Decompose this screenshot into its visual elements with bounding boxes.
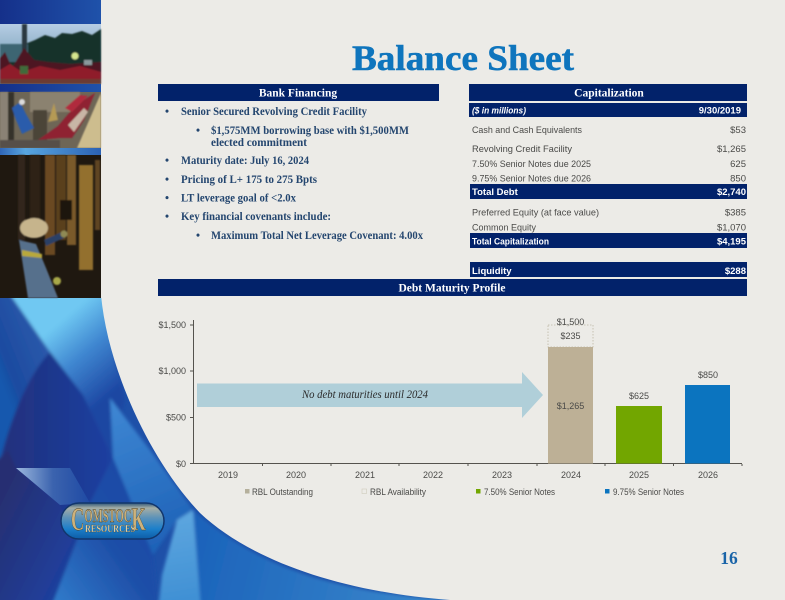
bullet list: bank terms: Maximum Total Net Leverage Covenant: 4.00x <box>211 230 423 242</box>
row: 7.50% notes: 625 <box>730 159 746 170</box>
bar chart: debt maturity <box>158 317 742 497</box>
legend <box>245 487 684 497</box>
x axis labels <box>218 470 718 480</box>
table header: 9/30/2019 <box>699 106 741 116</box>
legend: RBL Availability <box>370 487 426 497</box>
bullet list: bank terms: • <box>165 192 169 204</box>
row: 7.50% notes <box>472 159 746 170</box>
bar: 2024 RBL availability: $1,500 <box>557 317 584 327</box>
logo: Comstock Resources: OMSTOC <box>84 506 131 527</box>
bar: 2024 RBL availability <box>548 317 593 347</box>
bullet list: bank terms: • <box>165 155 169 167</box>
heading: debt maturity profile <box>158 279 747 296</box>
title: Balance Sheet <box>352 38 574 78</box>
heading: capitalization <box>469 84 747 101</box>
bullet list: bank terms: • <box>196 125 200 137</box>
arrow: no debt maturities until 2024 <box>197 372 543 418</box>
heading: debt maturity profile: Debt Maturity Profile <box>398 282 506 294</box>
y axis labels: $500 <box>166 412 186 422</box>
heading: capitalization: Capitalization <box>574 88 644 100</box>
panel: capitalization <box>469 84 747 277</box>
y axis labels: $1,500 <box>158 320 186 330</box>
bullet list: bank terms: • <box>196 230 200 242</box>
row: total capitalization: $4,195 <box>717 236 747 248</box>
row: cash <box>472 125 746 136</box>
logo: Comstock Resources: K <box>131 500 146 537</box>
row: total debt <box>470 184 747 199</box>
row: 9.75% notes <box>472 174 746 184</box>
row: total capitalization <box>470 233 747 248</box>
row: 9.75% notes: 9.75% Senior Notes due 2026 <box>472 174 591 184</box>
photo strip <box>0 0 101 298</box>
page number: 16 <box>720 548 738 568</box>
photo: drilling rig at dusk <box>0 24 101 84</box>
row: revolving credit facility: $1,265 <box>717 144 746 155</box>
bullet list: bank terms: • <box>165 106 169 118</box>
bar: 2025 senior notes: $625 <box>629 391 649 401</box>
bullet list: bank terms: Senior Secured Revolving Credit Facility <box>181 106 367 118</box>
x axis labels: 2022 <box>423 470 443 480</box>
row: common equity: Common Equity <box>472 222 536 234</box>
x axis labels: 2021 <box>355 470 375 480</box>
x axis labels: 2020 <box>286 470 306 480</box>
row: 7.50% notes: 7.50% Senior Notes due 2025 <box>472 159 591 170</box>
row: common equity <box>472 222 746 234</box>
photo: crew on rig floor <box>0 92 101 148</box>
photo: worker at drill pipe <box>0 155 101 298</box>
legend: 9.75% Senior Notes <box>613 487 684 497</box>
row: total debt: Total Debt <box>472 187 519 198</box>
arrow: no debt maturities until 2024: No debt maturities until 2024 <box>301 389 428 401</box>
x axis labels: 2023 <box>492 470 512 480</box>
x axis labels: 2025 <box>629 470 649 480</box>
row: liquidity: $288 <box>725 266 746 277</box>
light blue divider band <box>0 148 101 155</box>
table header <box>469 103 747 117</box>
row: revolving credit facility <box>472 144 746 155</box>
x axis labels: 2019 <box>218 470 238 480</box>
x axis labels: 2026 <box>698 470 718 480</box>
row: cash: $53 <box>730 125 746 136</box>
row: revolving credit facility: Revolving Credit Facility <box>472 144 572 155</box>
row: liquidity <box>470 262 747 277</box>
y axis labels: $0 <box>176 459 186 469</box>
blue swoosh background <box>0 290 460 600</box>
row: preferred equity: $385 <box>725 208 746 218</box>
bullet list: bank terms <box>165 106 423 242</box>
bar: 2025 senior notes <box>616 391 662 464</box>
white content panel edge <box>101 295 785 600</box>
bar: 2026 senior notes: $850 <box>698 370 718 380</box>
bullet list: bank terms: • <box>165 174 169 186</box>
bullet list: bank terms: • <box>165 211 169 223</box>
legend: 7.50% Senior Notes <box>484 487 555 497</box>
y axis labels <box>158 320 186 469</box>
y axis labels: $1,000 <box>158 366 186 376</box>
row: liquidity: Liquidity <box>472 266 512 277</box>
row: preferred equity: Preferred Equity (at face value) <box>472 208 599 218</box>
bar: 2024 RBL availability: $235 <box>560 331 581 341</box>
row: 9.75% notes: 850 <box>730 174 746 184</box>
bullet list: bank terms: Maturity date: July 16, 2024 <box>181 155 309 167</box>
logo: Comstock Resources: RESOURCES <box>85 523 135 535</box>
bullet list: bank terms: Key financial covenants include: <box>181 211 331 223</box>
heading: bank financing: Bank Financing <box>259 88 337 100</box>
heading: bank financing <box>158 84 439 101</box>
row: total debt: $2,740 <box>717 187 746 198</box>
bar: 2024 RBL outstanding: $1,265 <box>557 401 584 411</box>
logo: Comstock Resources: C <box>71 500 84 537</box>
bar: 2026 senior notes <box>685 370 730 464</box>
legend: RBL Outstanding <box>252 487 313 497</box>
logo: Comstock Resources <box>61 500 164 539</box>
row: preferred equity <box>472 208 746 218</box>
bullet list: bank terms: elected commitment <box>211 137 307 149</box>
top blue band <box>0 0 101 24</box>
bullet list: bank terms: LT leverage goal of <2.0x <box>181 192 296 204</box>
bullet list: bank terms: Pricing of L+ 175 to 275 Bpts <box>181 174 317 186</box>
row: cash: Cash and Cash Equivalents <box>472 125 582 136</box>
panel: bank financing <box>158 84 439 242</box>
blue divider band <box>0 84 101 92</box>
bullet list: bank terms: $1,575MM borrowing base with $1,500MM <box>211 124 409 137</box>
row: total capitalization: Total Capitalization <box>472 236 549 248</box>
axes <box>190 320 742 466</box>
row: common equity: $1,070 <box>717 222 746 234</box>
bar: 2024 RBL outstanding <box>548 347 593 464</box>
table header: ($ in millions) <box>472 106 526 116</box>
x axis labels: 2024 <box>561 470 581 480</box>
